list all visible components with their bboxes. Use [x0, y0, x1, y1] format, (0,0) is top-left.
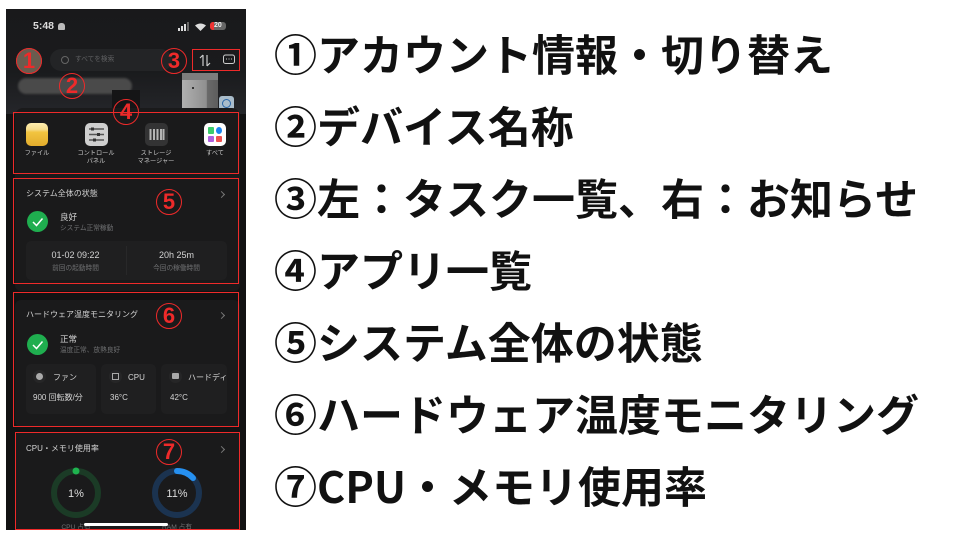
badge 5: 5 [163, 189, 175, 214]
icon: all apps [204, 123, 226, 146]
home indicator [84, 523, 168, 526]
box 7 [15, 432, 240, 530]
icon: search [61, 56, 69, 64]
fan tile: ファン [53, 373, 77, 382]
box 4 [13, 112, 239, 174]
icon: battery: 20 [214, 22, 222, 29]
device name blurred [18, 78, 132, 94]
text: item 1: ①アカウント情報・切り替え [274, 22, 833, 84]
icon: task list arrows [200, 54, 235, 66]
cpu and ram rings [51, 468, 202, 518]
callout boxes [13, 48, 240, 530]
app: storage manager: マネージャー [138, 158, 174, 165]
heading: CPU・メモリ使用率 [26, 444, 99, 453]
disk tile [161, 364, 227, 414]
badge 5 [156, 189, 182, 215]
cpu tile: 36°C [110, 393, 128, 402]
badge 1 [16, 48, 42, 74]
icon: disk [169, 370, 182, 383]
status bar: 5:48 [33, 20, 54, 32]
icon: check [27, 334, 48, 355]
ram ring [155, 471, 199, 515]
account avatar [16, 48, 42, 74]
uptime panel [26, 241, 227, 280]
disk tile: ハードディ [188, 373, 227, 382]
uptime panel: 前回の起動時間 [52, 265, 99, 272]
text: item 3: ③左：タスク一覧、右：お知らせ [274, 166, 918, 228]
app: storage manager [138, 123, 174, 165]
panel: app list and system status: システム正常稼動 [60, 225, 113, 232]
icon: storage [145, 123, 168, 146]
badge 6 [156, 303, 182, 329]
panel: hardware temperature: 温度正常、放熱良好 [60, 347, 120, 354]
header background [6, 9, 246, 114]
icon: folder [26, 123, 48, 146]
device image [182, 73, 218, 111]
disk tile: 42°C [170, 393, 188, 402]
badge 7: 7 [163, 439, 175, 464]
icon: sliders [85, 123, 108, 146]
box 3 [192, 49, 240, 71]
search bar [50, 49, 172, 71]
badge 3: 3 [168, 48, 180, 73]
app: all [204, 123, 226, 157]
status text: 良好 [60, 212, 77, 222]
cpu tile: CPU [128, 373, 145, 382]
badge 1: 1 [23, 48, 35, 73]
dark notch behind badge [112, 90, 140, 112]
icon: chevron [218, 191, 225, 198]
icon: chevron [218, 446, 225, 453]
uptime panel: 01-02 09:22 [51, 250, 100, 260]
app: files: ファイル [25, 150, 49, 157]
uptime panel: 20h 25m [159, 250, 194, 260]
status text: 正常 [60, 334, 77, 344]
panel: cpu memory usage [15, 432, 240, 530]
badge 2: 2 [66, 73, 78, 98]
box 6 [13, 292, 239, 427]
box 5 [13, 178, 239, 284]
fan tile [26, 364, 96, 414]
heading: ハードウェア温度モニタリング [26, 310, 138, 319]
app: control panel: コントロール [77, 150, 115, 157]
device badge icon [219, 96, 234, 111]
icon: check [27, 211, 48, 232]
panel: hardware temperature [15, 300, 240, 427]
status bar [33, 20, 226, 32]
icon: signal wifi [178, 22, 206, 31]
phone screenshot [6, 9, 246, 530]
badge 6: 6 [163, 303, 175, 328]
badge 2 [59, 73, 85, 99]
icon: battery [210, 22, 226, 30]
cpu ring: 1% [68, 488, 84, 500]
icon: chevron [218, 312, 225, 319]
icon: mute bell [58, 23, 65, 30]
cpu tile [101, 364, 156, 414]
text: item 2: ②デバイス名称 [274, 94, 574, 156]
uptime panel: 今回の稼働時間 [153, 265, 200, 272]
app: control panel: パネル [87, 158, 105, 165]
icon: fan [33, 370, 46, 383]
cpu ring [54, 468, 98, 515]
app: storage manager: ストレージ [141, 150, 171, 157]
badge 4: 4 [120, 99, 132, 124]
text: item 7: ⑦CPU・メモリ使用率 [274, 454, 707, 516]
badge 4 [113, 99, 139, 125]
search bar: すべてを検索 [75, 56, 114, 63]
text: item 6: ⑥ハードウェア温度モニタリング [274, 382, 919, 444]
text: item 4: ④アプリ一覧 [274, 238, 532, 300]
text: item 5: ⑤システム全体の状態 [274, 310, 703, 372]
app: control panel [77, 123, 115, 165]
badge 3 [161, 48, 187, 74]
app: files [25, 123, 49, 157]
app: all: すべて [206, 150, 224, 157]
panel: app list and system status [15, 108, 240, 291]
icon: chip [109, 370, 122, 383]
ram ring: 11% [166, 488, 188, 500]
badge 7 [156, 439, 182, 465]
heading: システム全体の状態 [26, 189, 98, 198]
fan tile: 900 回転数/分 [33, 393, 83, 402]
